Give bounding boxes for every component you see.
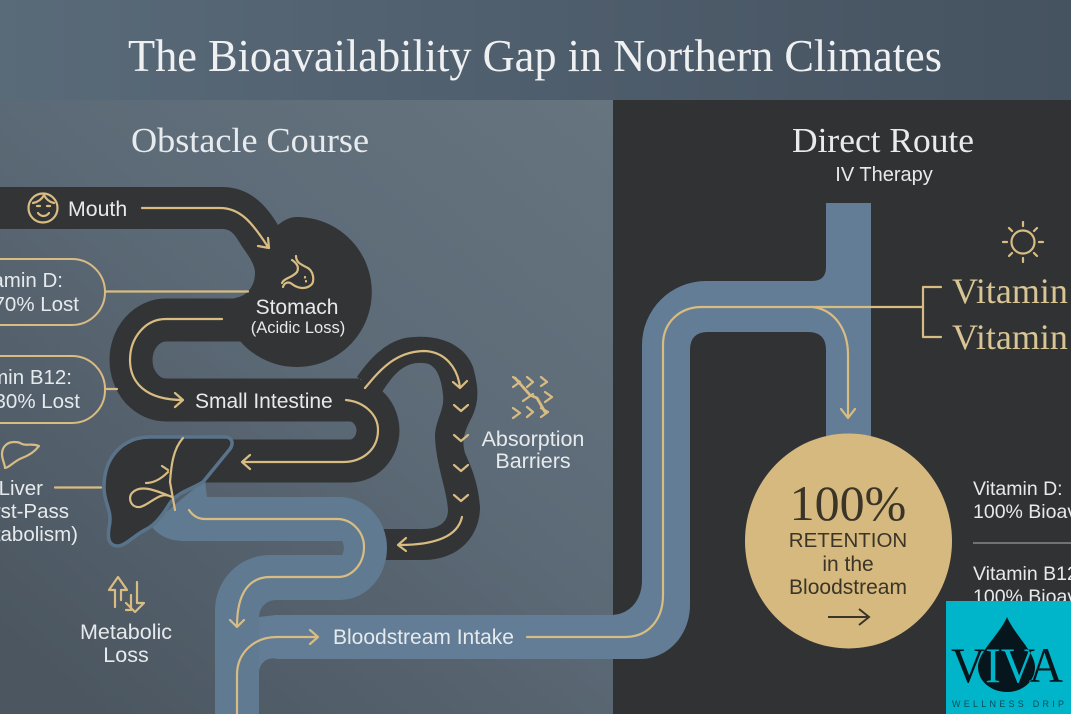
label: liver — [0, 477, 78, 546]
icon: liver small — [2, 442, 39, 468]
panel: obstacle course background — [0, 100, 613, 714]
subheading: IV therapy: IV Therapy — [835, 164, 933, 186]
logo: viva wellness drip — [946, 601, 1071, 714]
retention circle: 100% — [790, 475, 906, 531]
retention circle: in the — [822, 553, 874, 576]
icon: absorption barriers — [513, 377, 552, 418]
callout: vitamin D loss — [0, 259, 248, 325]
arrow: bloodstream intake — [237, 630, 318, 714]
arrow: intestine loop — [242, 400, 378, 469]
arrow: mouth to stomach — [142, 208, 269, 248]
icon: metabolic loss arrows — [109, 577, 144, 612]
label: bloodstream intake: Bloodstream Intake — [333, 626, 514, 649]
label: metabolic loss — [80, 620, 172, 667]
retention circle: RETENTION — [789, 529, 907, 552]
heading: direct route: Direct Route — [792, 121, 974, 160]
arrow: upper loop — [365, 351, 467, 388]
icon: stomach — [282, 256, 313, 288]
heading: obstacle course: Obstacle Course — [131, 121, 369, 160]
arrow: branch to circle — [813, 307, 855, 418]
digestive tract pipe — [0, 187, 480, 560]
label: metabolic loss: Metabolic — [80, 620, 172, 644]
text: vitamin B12 bioavailability — [973, 563, 1071, 608]
connector: liver — [55, 486, 101, 489]
arrow: stomach to small intestine — [130, 319, 222, 407]
blue pipe: from liver to bloodstream — [150, 203, 871, 714]
icon: mouth face — [28, 194, 58, 222]
panel: direct route background — [613, 100, 1071, 714]
arrow: IV flow — [527, 307, 923, 637]
label: absorption barriers — [482, 427, 584, 473]
callout: vitamin B12 loss — [0, 356, 117, 423]
logo: viva wellness drip: WELLNESS DRIP — [952, 699, 1064, 709]
label: acidic loss: (Acidic Loss) — [251, 319, 345, 337]
chevrons: absorption — [454, 405, 468, 501]
title: The Bioavailability Gap in Northern Climates — [128, 30, 942, 81]
logo: viva wellness drip: VIVA — [951, 637, 1063, 693]
label: metabolic loss: Loss — [103, 643, 149, 667]
header band — [0, 0, 1071, 100]
text: vitamin D bioavailability — [973, 478, 1071, 523]
label: mouth: Mouth — [68, 197, 127, 221]
label: small intestine: Small Intestine — [195, 390, 333, 413]
arrow: in circle — [828, 609, 869, 625]
text: vitamin D bioavailability: Vitamin D: — [973, 478, 1063, 500]
icon: sun — [1003, 222, 1043, 262]
retention circle — [745, 434, 952, 648]
retention circle: Bloodstream — [789, 576, 907, 599]
label: absorption barriers: Barriers — [495, 449, 571, 473]
label: absorption barriers: Absorption — [482, 427, 584, 451]
bracket — [923, 287, 941, 337]
logo: viva wellness drip: VIVA — [951, 637, 1063, 693]
arrow: lower loop — [398, 517, 462, 551]
label: stomach: Stomach — [256, 296, 338, 319]
arrow: blue pipe path — [189, 510, 364, 627]
liver inner icon — [130, 438, 183, 510]
liver organ — [104, 437, 232, 546]
